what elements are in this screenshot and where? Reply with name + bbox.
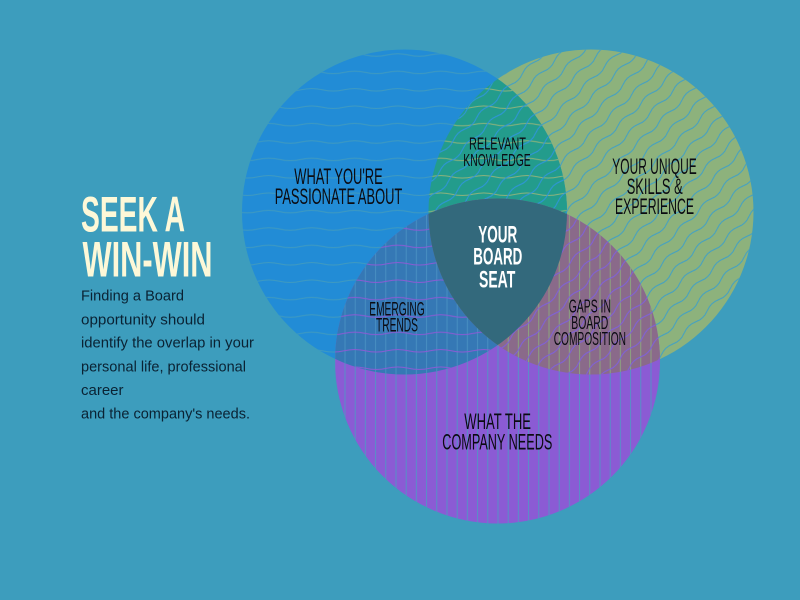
label: what the company needs: COMPANY NEEDS [442,429,552,454]
label: your unique skills and experience: EXPERIENCE [615,194,694,219]
label: gaps in board composition: BOARD [571,313,608,333]
title: seek a win-win: WIN-WIN [82,232,212,288]
label: what the company needs: WHAT THE [464,409,531,434]
overlap: passion and skills [428,79,567,214]
circle: your unique skills [428,50,754,374]
label: what you're passionate about: PASSIONATE ABOUT [275,184,402,209]
label: emerging trends [369,300,425,337]
body paragraph: and the company's needs. [81,405,250,422]
body paragraph: Finding a Board [81,288,184,305]
label: relevant knowledge: KNOWLEDGE [463,150,531,170]
label: what you're passionate about [275,164,402,209]
body paragraph: opportunity should [81,311,205,328]
label: your board seat [473,222,522,294]
label: your board seat: SEAT [479,268,516,294]
label: relevant knowledge [463,133,531,170]
body paragraph: identify the overlap in your [81,335,254,352]
label: relevant knowledge: RELEVANT [469,133,526,153]
overlap: passion and company [335,210,562,374]
label: emerging trends: TRENDS [376,316,418,337]
label: emerging trends: EMERGING [369,300,425,321]
overlap: center board seat [428,198,567,345]
circle: what you're passionate about [242,50,567,374]
label: gaps in board composition: GAPS IN [569,296,611,316]
circle: what the company needs [335,198,660,524]
label: gaps in board composition [554,296,626,349]
label: your unique skills and experience: SKILLS & [627,174,683,199]
label: your unique skills and experience [612,154,697,219]
label: what you're passionate about: WHAT YOU'RE [294,164,383,189]
label: what the company needs [442,409,552,454]
body paragraph: career [81,382,124,399]
title: seek a win-win [81,187,212,288]
venn diagram [242,50,754,524]
title: seek a win-win: SEEK A [81,187,185,243]
body paragraph [81,288,254,422]
label: gaps in board composition: COMPOSITION [554,329,626,349]
body paragraph: personal life, professional [81,359,246,376]
label: your board seat: YOUR [478,222,517,248]
label: your unique skills and experience: YOUR UNIQUE [612,154,697,179]
overlap: skills and company [428,198,660,374]
label: your board seat: BOARD [473,244,522,270]
